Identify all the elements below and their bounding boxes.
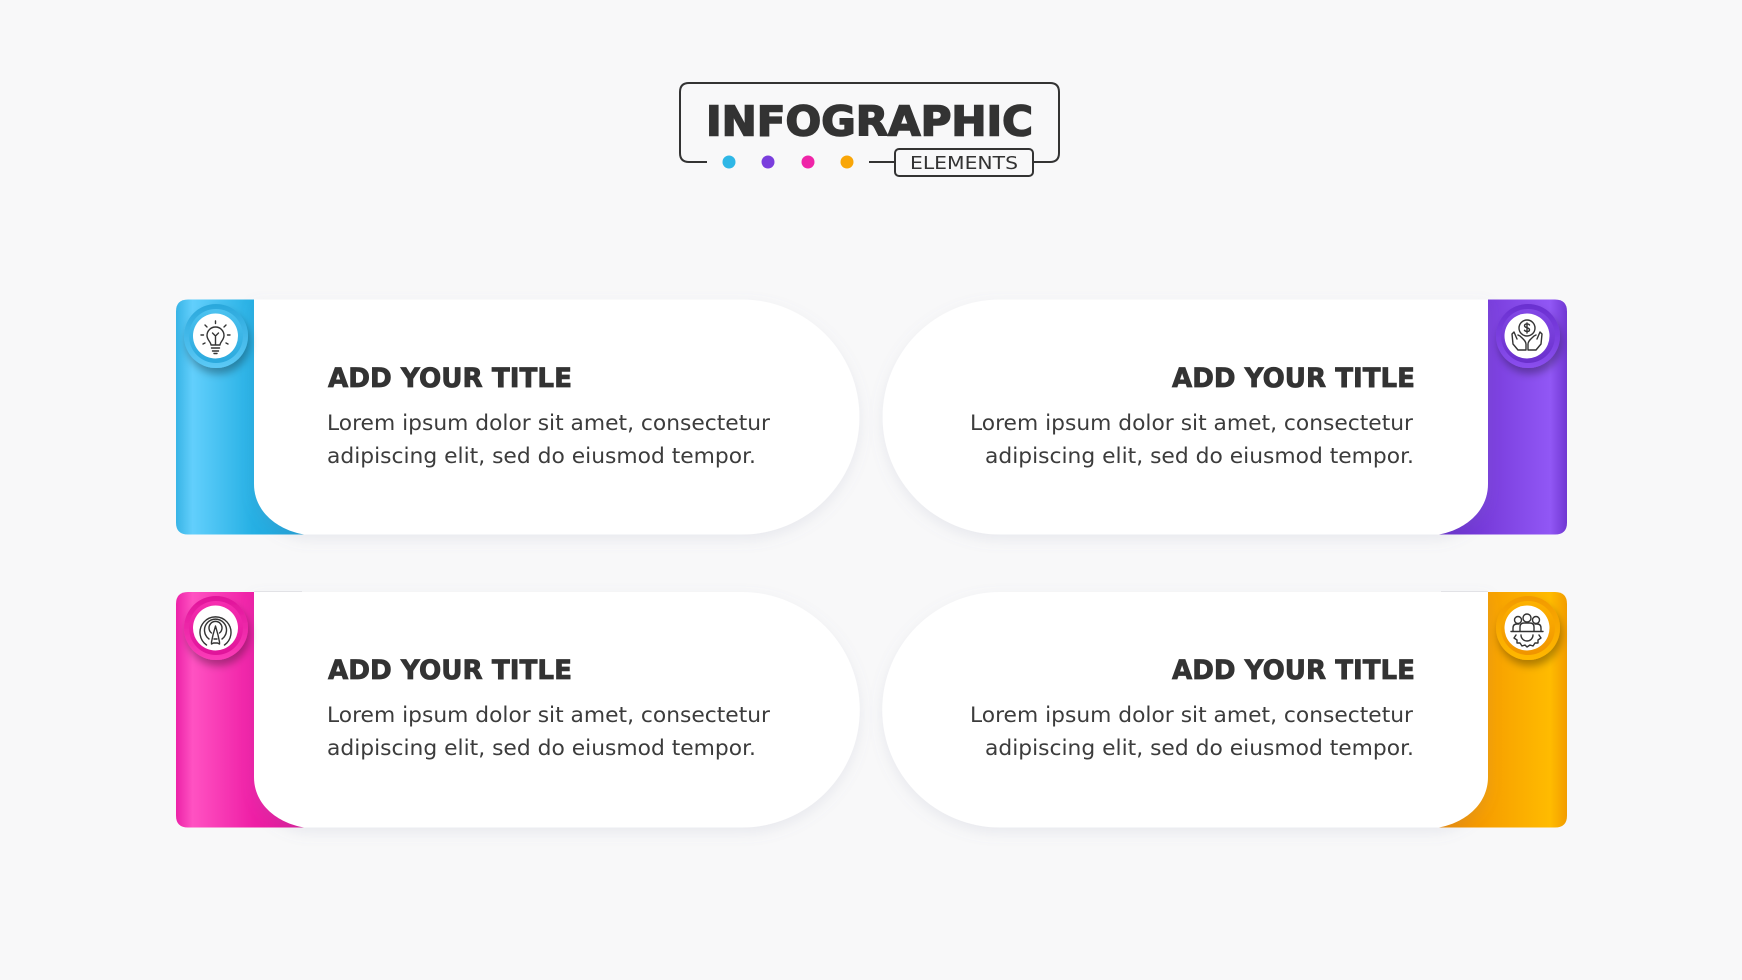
card body — [970, 411, 1414, 469]
icon: team with gear — [1496, 596, 1560, 660]
colour bar — [176, 592, 304, 828]
faint top edge — [1441, 590, 1488, 592]
card body: adipiscing elit, sed do eiusmod tempor. — [985, 736, 1414, 761]
title badge — [680, 83, 1059, 176]
icon: hands holding coin — [1496, 304, 1560, 368]
card title: ADD YOUR TITLE — [1172, 363, 1415, 394]
white card — [882, 592, 1488, 828]
card body — [327, 703, 770, 761]
colour bar — [1439, 300, 1567, 534]
panel: bottom left pink — [176, 592, 860, 828]
card body: adipiscing elit, sed do eiusmod tempor. — [327, 736, 756, 761]
white card — [883, 300, 1488, 534]
colour bar — [176, 300, 304, 534]
icon: light bulb — [184, 304, 248, 368]
card body: Lorem ipsum dolor sit amet, consectetur — [327, 411, 770, 436]
title frame — [680, 83, 1059, 162]
card body: Lorem ipsum dolor sit amet, consectetur — [970, 703, 1413, 728]
card body: adipiscing elit, sed do eiusmod tempor. — [327, 444, 756, 469]
elements tag — [895, 149, 1033, 176]
panel: top right purple — [883, 300, 1567, 534]
colour bar — [1439, 592, 1567, 828]
panel: bottom right orange — [882, 592, 1567, 828]
white card — [254, 300, 859, 534]
card title: ADD YOUR TITLE — [328, 363, 572, 394]
card body — [970, 703, 1414, 761]
card body: Lorem ipsum dolor sit amet, consectetur — [327, 703, 770, 728]
card title: ADD YOUR TITLE — [1172, 655, 1415, 686]
title text: INFOGRAPHIC — [706, 98, 1033, 146]
panel: top left blue — [176, 300, 859, 534]
card title: ADD YOUR TITLE — [328, 655, 572, 686]
elements tag: ELEMENTS — [910, 153, 1018, 174]
white card — [254, 592, 860, 828]
icon: target signal — [184, 596, 248, 660]
card body: adipiscing elit, sed do eiusmod tempor. — [985, 444, 1414, 469]
card body: Lorem ipsum dolor sit amet, consectetur — [970, 411, 1413, 436]
card body — [327, 411, 770, 469]
faint top edge — [254, 590, 302, 592]
colour dots — [722, 156, 854, 168]
